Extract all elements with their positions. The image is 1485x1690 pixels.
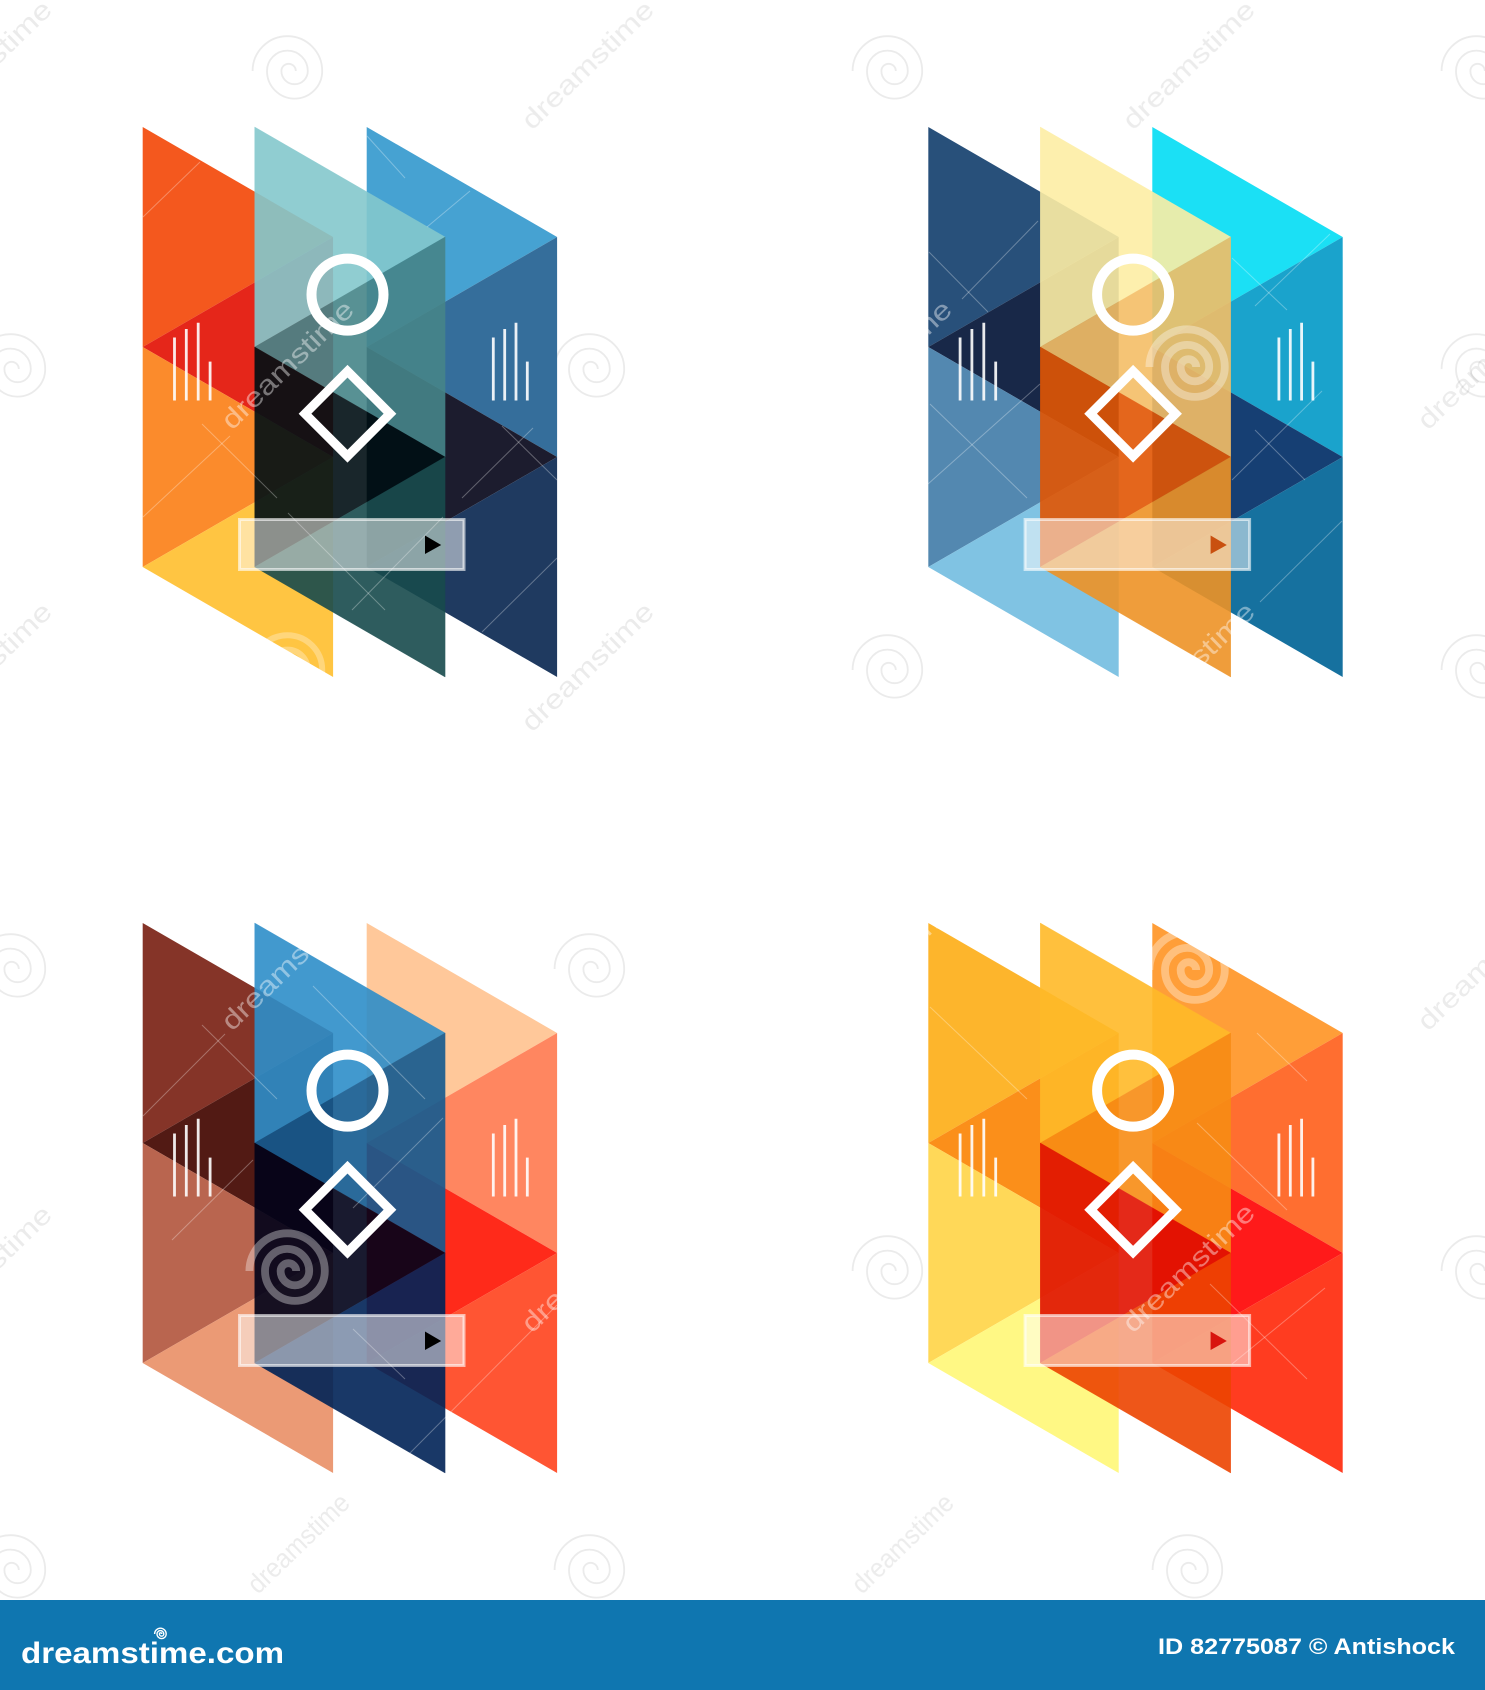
banner group 2: navy, yellow, cyan: [928, 127, 1343, 677]
watermark overlay: group 4: [813, 895, 1325, 1379]
panel: middle orange translucent: [1040, 923, 1231, 1473]
watermark text on background: dreamstime: [515, 596, 660, 737]
watermark overlay: group 2: [813, 221, 1342, 737]
watermark overlay: group 1: dreamstime: [215, 294, 360, 435]
watermark overlay: group 4: dreamstime: [813, 895, 958, 1036]
watermark text on background: dreamstime: [241, 1487, 356, 1599]
icon: play arrow: [425, 1332, 441, 1350]
button bar: [240, 520, 464, 570]
button bar: [240, 1316, 464, 1366]
watermark text on background: dreamstime: [1116, 0, 1261, 135]
icon: right bars: [493, 323, 527, 400]
banner group 4: yellow, orange, red: [928, 923, 1343, 1473]
panel: right blue: [367, 127, 557, 677]
icon: left bars: [960, 323, 996, 400]
panel: right peach and red: [367, 923, 557, 1473]
icon: right bars: [493, 1119, 527, 1196]
watermark overlay: group 1: [143, 136, 557, 698]
panel: middle yellow translucent: [1040, 127, 1231, 677]
icon: play arrow: [1211, 536, 1227, 554]
footer logo spiral: [155, 1628, 166, 1639]
watermark overlay: group 4: dreamstime: [1116, 1197, 1261, 1338]
panel: right orange and red: [1152, 923, 1343, 1473]
watermark overlay: group 3: [143, 895, 660, 1453]
panel: middle blue translucent: [255, 923, 445, 1473]
panel: left navy: [928, 127, 1119, 677]
icon: diamond: [1091, 371, 1176, 456]
watermark overlay: group 3: dreamstime: [515, 1197, 660, 1338]
footer credit text: ID 82775087 © Antishock: [1158, 1634, 1456, 1659]
panel: right cyan: [1152, 127, 1343, 677]
icon: circle: [1097, 259, 1169, 331]
icon: left bars: [174, 323, 210, 400]
icon: circle: [1097, 1055, 1169, 1127]
panel: left brown: [143, 923, 333, 1473]
banner group 1: orange, teal, blue: [143, 127, 557, 677]
watermark overlay: group 2: dreamstime: [1116, 596, 1261, 737]
button bar: [1025, 1316, 1250, 1366]
icon: play arrow: [1211, 1332, 1227, 1350]
footer logo text: dreamstime.com: [21, 1637, 284, 1670]
icon: circle: [312, 1055, 384, 1127]
panel: middle teal translucent: [255, 127, 445, 677]
banner group 3: brown, blue, peach: [143, 923, 557, 1473]
watermark overlay: group 3: dreamstime: [215, 895, 360, 1036]
panel: left orange: [143, 127, 333, 677]
icon: left bars: [960, 1119, 996, 1196]
icon: circle: [312, 259, 384, 331]
watermark overlay: group 2: dreamstime: [813, 294, 958, 435]
icon: right bars: [1279, 323, 1313, 400]
icon: diamond: [1091, 1167, 1176, 1252]
footer bar: [0, 1600, 1485, 1690]
icon: diamond: [305, 371, 390, 456]
watermark text on background: dreamstime: [515, 0, 660, 135]
icon: diamond: [305, 1167, 390, 1252]
icon: play arrow: [425, 536, 441, 554]
panel: left yellow: [928, 923, 1119, 1473]
icon: left bars: [174, 1119, 210, 1196]
button bar: [1025, 520, 1250, 570]
watermark text on background: dreamstime: [845, 1487, 960, 1599]
icon: right bars: [1279, 1119, 1313, 1196]
